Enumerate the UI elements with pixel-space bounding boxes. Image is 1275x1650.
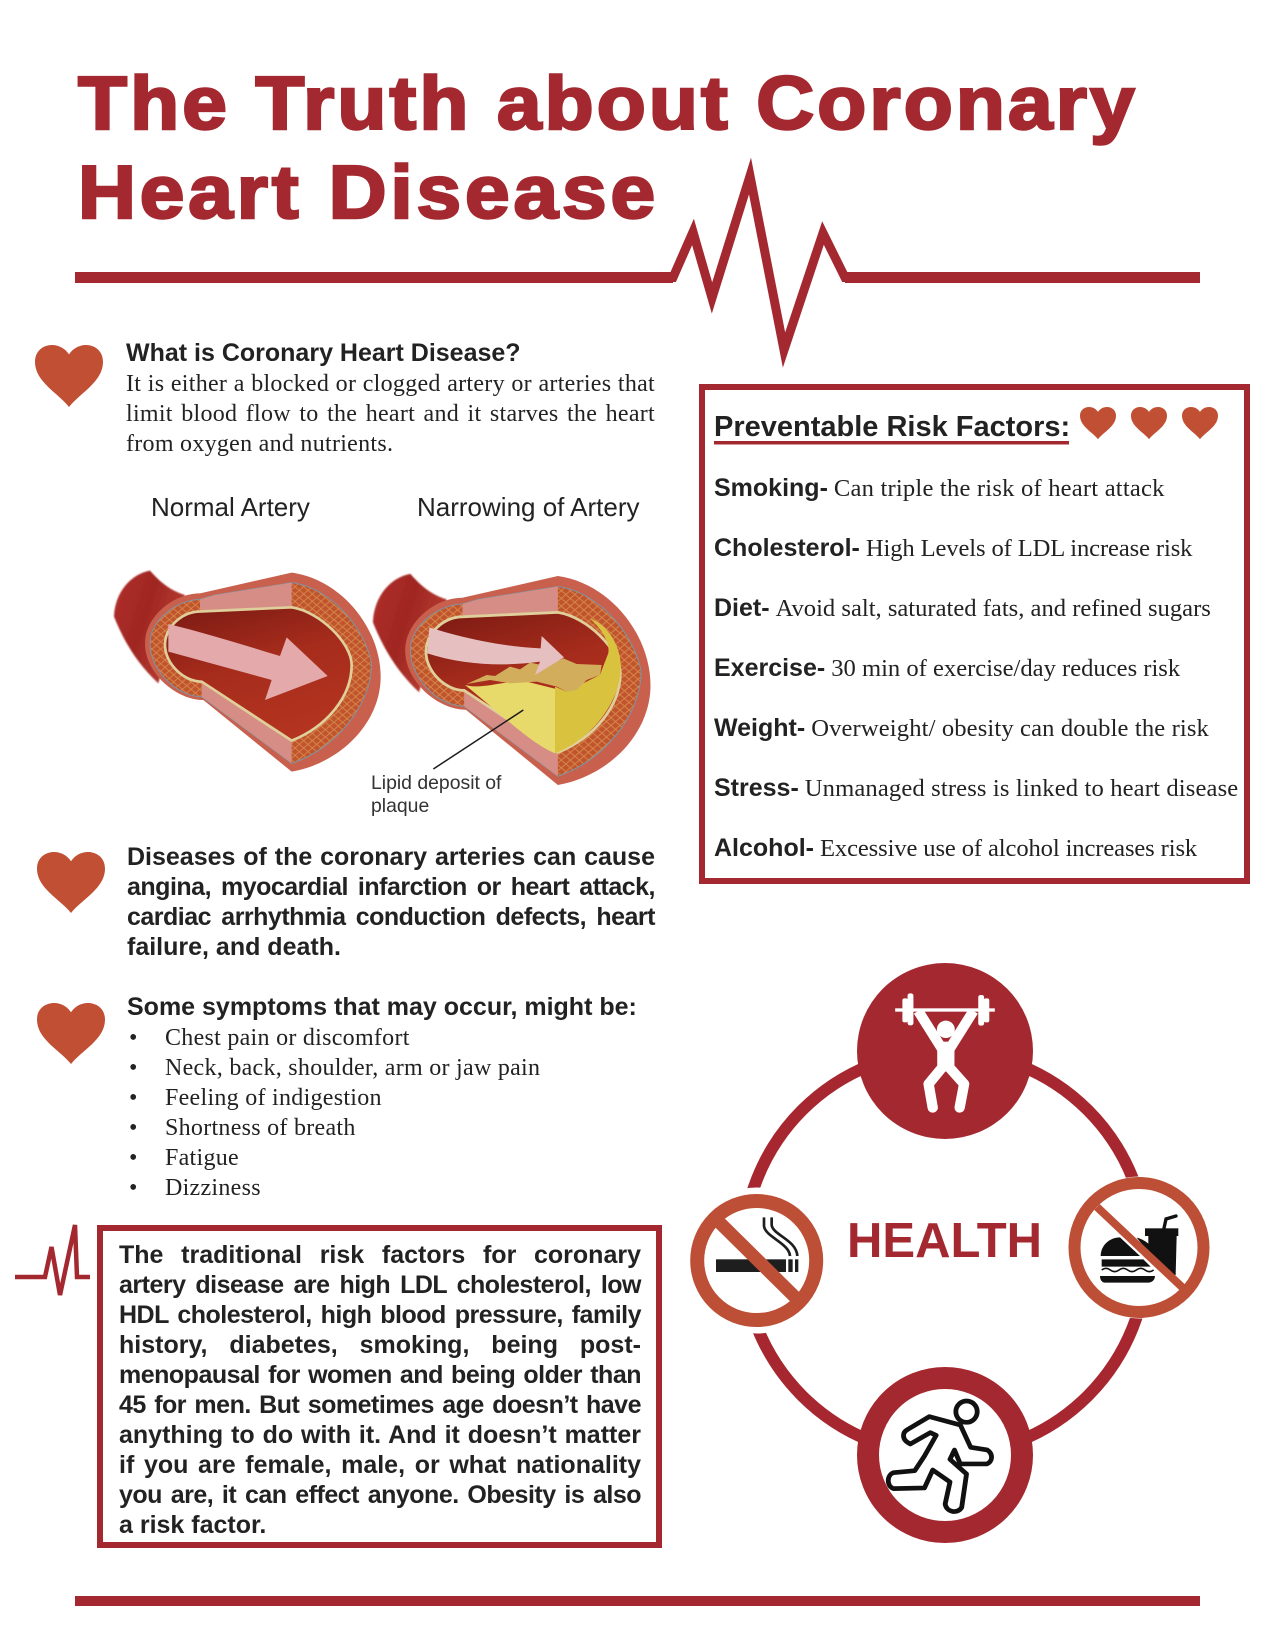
label: lipid deposit of plaque: Lipid deposit of bbox=[371, 772, 501, 794]
symptoms heading: Some symptoms that may occur, might be: bbox=[127, 993, 637, 1021]
symptoms list: Fatigue bbox=[165, 1145, 239, 1171]
symptoms list: • bbox=[129, 1115, 138, 1141]
icon: heart beside symptoms bbox=[37, 1003, 105, 1064]
title rule with heartbeat line bbox=[75, 176, 1200, 350]
definition text: from oxygen and nutrients. bbox=[126, 431, 393, 457]
icon: heart beside diseases bbox=[37, 852, 105, 913]
health label: HEALTH bbox=[847, 1214, 1042, 1268]
text block: traditional risk factors: The traditional risk factors for coronary bbox=[119, 1241, 641, 1269]
cholesterol: Cholesterol- High Levels of LDL increase risk bbox=[714, 534, 1192, 562]
symptoms list: Dizziness bbox=[165, 1175, 261, 1201]
question heading: What is Coronary Heart Disease? bbox=[126, 339, 521, 367]
text block: traditional risk factors: anything to do with it. And it doesn’t matter bbox=[119, 1421, 641, 1449]
symptoms list: Chest pain or discomfort bbox=[165, 1025, 410, 1051]
symptoms list: • bbox=[129, 1025, 138, 1051]
text block: traditional risk factors: a risk factor. bbox=[119, 1511, 266, 1539]
diet: Diet- Avoid salt, saturated fats, and refined sugars bbox=[714, 594, 1211, 622]
title: Heart Disease bbox=[78, 150, 659, 234]
label: narrowing of artery: Narrowing of Artery bbox=[417, 492, 640, 522]
text block: traditional risk factors: 45 for men. But sometimes age doesn’t have bbox=[119, 1391, 641, 1419]
text block: traditional risk factors: you are, it can effect anyone. Obesity is also bbox=[119, 1481, 641, 1509]
panel: traditional risk factors box bbox=[100, 1228, 659, 1545]
symptoms list: • bbox=[129, 1145, 138, 1171]
text block: traditional risk factors: history, diabetes, smoking, being post- bbox=[119, 1331, 641, 1359]
label: lipid deposit of plaque: plaque bbox=[371, 795, 429, 817]
definition text: limit blood flow to the heart and it starves the heart bbox=[126, 401, 655, 427]
text block: traditional risk factors: artery disease are high LDL cholesterol, low bbox=[119, 1271, 641, 1299]
symptoms list: Shortness of breath bbox=[165, 1115, 356, 1141]
symptoms list bbox=[129, 1025, 540, 1201]
icon: no junk food bbox=[1068, 1176, 1210, 1318]
weight: Weight- Overweight/ obesity can double the risk bbox=[714, 714, 1209, 742]
exercise: Exercise- 30 min of exercise/day reduces risk bbox=[714, 654, 1180, 682]
text block: traditional risk factors: if you are female, male, or what nationality bbox=[119, 1451, 641, 1479]
text block: traditional risk factors bbox=[119, 1241, 642, 1539]
text block: diseases of coronary arteries: Diseases of the coronary arteries can cause bbox=[127, 843, 655, 871]
text block: traditional risk factors: HDL cholesterol, high blood pressure, family bbox=[119, 1301, 641, 1329]
normal artery bbox=[114, 571, 381, 772]
symptoms list: Feeling of indigestion bbox=[165, 1085, 382, 1111]
label: normal artery: Normal Artery bbox=[151, 492, 310, 522]
icon: heart beside definition bbox=[35, 345, 103, 407]
icon: runner in ring bbox=[868, 1378, 1022, 1532]
artery illustration bbox=[114, 571, 651, 785]
health cycle diagram bbox=[684, 963, 1210, 1532]
symptoms list: • bbox=[129, 1055, 138, 1081]
definition text bbox=[126, 371, 655, 457]
icon: no smoking bbox=[684, 1188, 830, 1334]
text block: diseases of coronary arteries: cardiac arrhythmia conduction defects, heart bbox=[127, 903, 655, 931]
title bbox=[78, 61, 1138, 234]
smoking: Smoking- Can triple the risk of heart attack bbox=[714, 474, 1165, 502]
icon: small heartbeat bbox=[15, 1225, 90, 1295]
narrowed artery with plaque bbox=[373, 574, 651, 785]
text block: symptoms bbox=[127, 993, 637, 1201]
text block: diseases of coronary arteries: angina, myocardial infarction or heart attack, bbox=[127, 873, 655, 901]
definition text: It is either a blocked or clogged artery or arteries that bbox=[126, 371, 655, 397]
panel: preventable risk factors box bbox=[702, 387, 1247, 881]
ring bbox=[743, 1051, 1147, 1455]
heading underline bbox=[714, 441, 1069, 444]
stress: Stress- Unmanaged stress is linked to heart disease bbox=[714, 774, 1238, 802]
text block: diseases of coronary arteries: failure, and death. bbox=[127, 933, 341, 961]
label: lipid deposit of plaque bbox=[371, 772, 502, 817]
bottom rule bbox=[75, 1596, 1200, 1606]
text block: traditional risk factors: menopausal for women and being older than bbox=[119, 1361, 641, 1389]
risk factor list bbox=[714, 474, 1238, 862]
alcohol: Alcohol- Excessive use of alcohol increases risk bbox=[714, 834, 1197, 862]
symptoms list: Neck, back, shoulder, arm or jaw pain bbox=[165, 1055, 540, 1081]
text block: diseases of coronary arteries bbox=[127, 843, 656, 961]
symptoms list: • bbox=[129, 1175, 138, 1201]
heading: preventable risk factors: Preventable Risk Factors: bbox=[714, 411, 1070, 443]
icon: weightlifter in red circle bbox=[857, 963, 1033, 1139]
symptoms list: • bbox=[129, 1085, 138, 1111]
title: The Truth about Coronary bbox=[78, 61, 1138, 145]
text block: what is coronary heart disease bbox=[126, 339, 655, 457]
hearts in risk factors heading bbox=[1080, 407, 1218, 439]
